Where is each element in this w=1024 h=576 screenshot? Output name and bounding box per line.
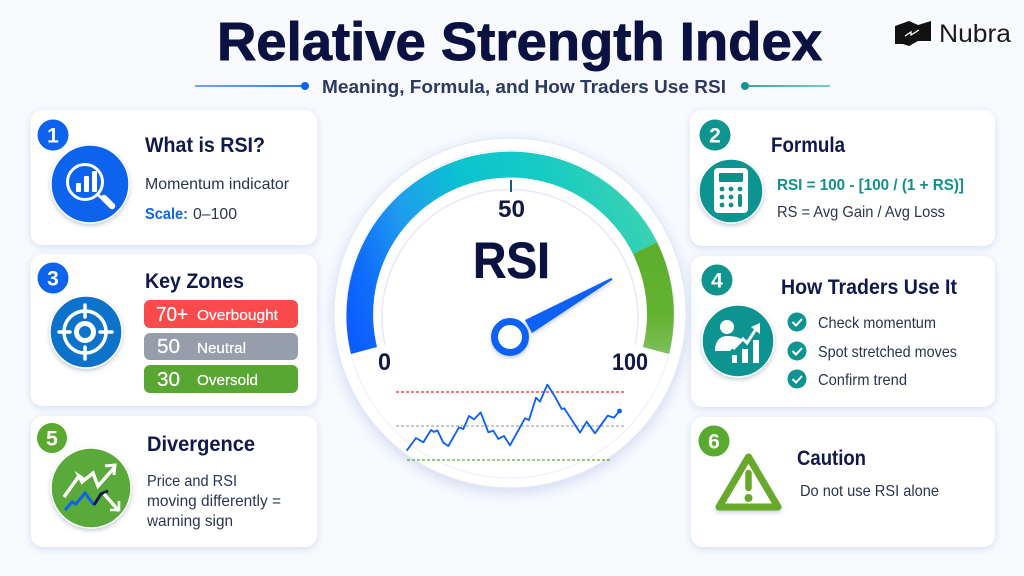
zone: neutral: Neutral bbox=[197, 340, 246, 357]
icon: warning triangle bbox=[719, 457, 778, 507]
zone: neutral bbox=[144, 333, 298, 360]
label RSI: RSI bbox=[473, 232, 550, 289]
badge 5 bbox=[37, 423, 67, 453]
zone: oversold: 30 bbox=[157, 369, 180, 391]
badge 6: 6 bbox=[708, 430, 720, 454]
subtitle with accent lines: Meaning, Formula, and How Traders Use RSI bbox=[322, 76, 726, 97]
formula: RSI = 100 - [100 / (1 + RS)] bbox=[777, 177, 964, 194]
needle hub bbox=[494, 322, 526, 352]
panel: key zones bbox=[30, 254, 317, 406]
panel: how traders use it bbox=[691, 256, 995, 407]
panel: caution bbox=[691, 417, 995, 547]
heading: Formula bbox=[771, 134, 845, 157]
mini RSI chart bbox=[396, 385, 624, 460]
panel: divergence bbox=[31, 416, 317, 547]
zone: overbought: Overbought bbox=[197, 307, 279, 324]
icon: magnifier with bars bbox=[51, 145, 129, 223]
title: Relative Strength Index bbox=[217, 12, 822, 72]
item: spot stretched moves bbox=[788, 342, 957, 361]
heading: Divergence bbox=[147, 433, 255, 456]
gauge arc: blue to teal bbox=[346, 152, 657, 354]
scale value: 0–100 bbox=[193, 206, 237, 223]
label 0: 0 bbox=[378, 349, 391, 376]
needle bbox=[525, 278, 612, 333]
label 100: 100 bbox=[612, 349, 648, 376]
panel: formula bbox=[690, 110, 995, 246]
gauge dial face bbox=[334, 138, 686, 488]
icon: trader with rising chart bbox=[702, 305, 774, 377]
badge 3: 3 bbox=[47, 268, 59, 290]
badge 4 bbox=[702, 264, 732, 296]
scale label: Scale: bbox=[145, 206, 188, 223]
zone: neutral: 50 bbox=[157, 336, 180, 358]
item: check momentum bbox=[788, 312, 936, 332]
icon: target bbox=[50, 296, 122, 368]
badge 3 bbox=[38, 262, 68, 294]
label 50: 50 bbox=[498, 196, 525, 223]
subtitle with accent lines bbox=[195, 76, 830, 97]
heading: Caution bbox=[797, 447, 866, 470]
description: Do not use RSI alone bbox=[800, 483, 939, 500]
description: warning sign bbox=[146, 513, 233, 530]
badge 1: 1 bbox=[47, 124, 59, 148]
logo: Nubra: Nubra bbox=[939, 20, 1011, 48]
RS definition: RS = Avg Gain / Avg Loss bbox=[777, 204, 945, 221]
badge 6 bbox=[698, 426, 730, 456]
description: moving differently = bbox=[147, 493, 281, 510]
logo: Nubra bbox=[895, 20, 1011, 48]
badge 5: 5 bbox=[46, 428, 58, 450]
panel: what is RSI bbox=[30, 110, 317, 245]
item: confirm trend bbox=[788, 370, 907, 389]
badge 4: 4 bbox=[711, 270, 723, 292]
description bbox=[146, 473, 281, 530]
zone: oversold: Oversold bbox=[197, 372, 258, 389]
zone: overbought: 70+ bbox=[156, 304, 188, 326]
badge 2 bbox=[700, 120, 730, 150]
badge 1 bbox=[38, 120, 68, 150]
heading: Key Zones bbox=[145, 270, 244, 293]
item: spot stretched moves: Spot stretched moves bbox=[818, 344, 957, 361]
tick at 50 bbox=[510, 180, 512, 192]
description: Price and RSI bbox=[147, 473, 237, 490]
gauge arc: green zone bbox=[633, 242, 674, 354]
icon: diverging arrows bbox=[51, 448, 131, 528]
badge 2: 2 bbox=[709, 124, 721, 148]
heading: What is RSI? bbox=[145, 134, 265, 157]
heading: How Traders Use It bbox=[781, 276, 957, 299]
item: check momentum: Check momentum bbox=[818, 315, 936, 332]
icon: calculator bbox=[699, 159, 763, 223]
item: confirm trend: Confirm trend bbox=[818, 372, 907, 389]
gauge bbox=[334, 138, 686, 488]
zone: overbought bbox=[144, 300, 298, 328]
zone: oversold bbox=[144, 365, 298, 393]
description: Momentum indicator bbox=[145, 176, 290, 193]
